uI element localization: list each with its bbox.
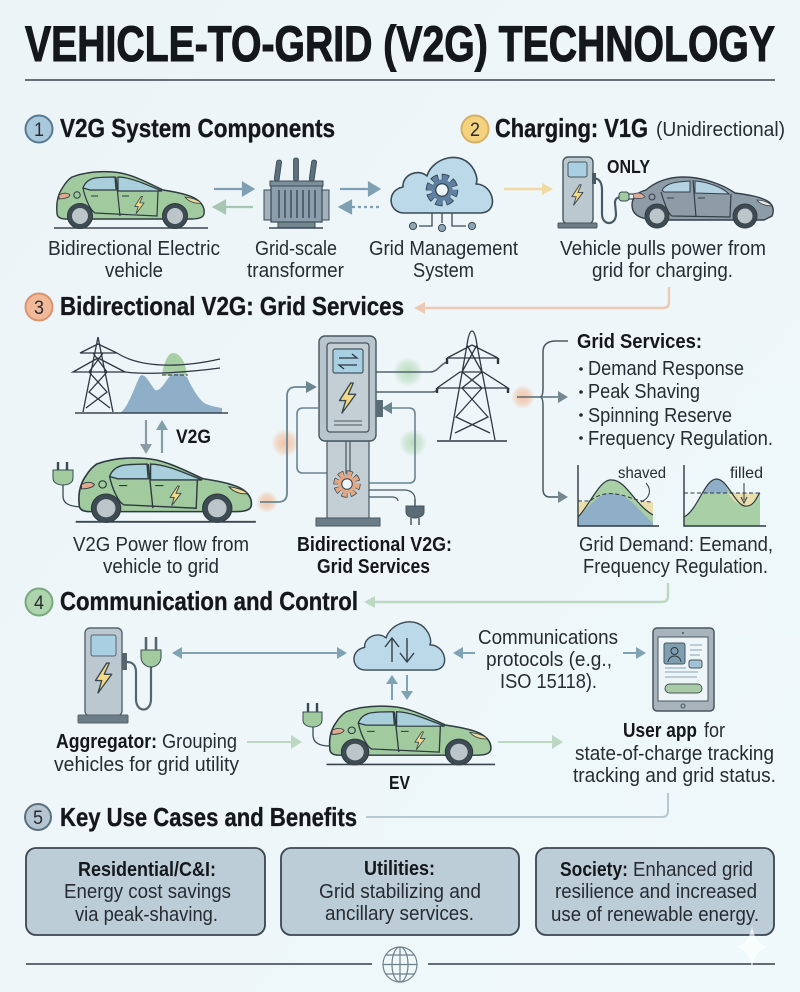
card: residential: [26, 848, 265, 935]
text: user app: User app: [623, 720, 697, 742]
panel: communication and control: [26, 586, 776, 817]
heading: Charging V1G: 2: [470, 120, 480, 141]
heading: Charging V1G: (Unidirectional): [656, 119, 785, 141]
icon: charging pump and plug: [558, 157, 634, 228]
card: utilities: [281, 848, 519, 935]
label: bidirectional V2G: Bidirectional V2G:: [297, 534, 452, 556]
card: utilities: ancillary services.: [325, 903, 474, 925]
icon: communications cloud: [354, 622, 445, 670]
text: user app: state-of-charge tracking: [575, 743, 774, 765]
heading: Charging V1G: [462, 113, 785, 143]
arrows: transformer and management system: [340, 183, 379, 213]
text: communications protocols: [478, 627, 618, 693]
panel: key use cases: [25, 802, 774, 935]
list: grid services: [577, 331, 773, 450]
text: aggregator: vehicles for grid utility: [54, 754, 239, 776]
arrow: EV to user app: [498, 735, 563, 749]
card: society: use of renewable energy.: [551, 904, 759, 926]
watermark sparkle: [736, 925, 768, 969]
icon: EV car: [327, 706, 495, 765]
text: vehicle pulls power: Vehicle pulls power from: [560, 238, 766, 260]
list: grid services: Spinning Reserve: [588, 405, 732, 427]
chart: peak shaved: shaved: [618, 465, 666, 482]
text: user app: for: [704, 720, 725, 742]
glows: [256, 357, 535, 513]
label: grid-scale transformer: Grid-scale: [255, 238, 337, 260]
heading: Bidirectional V2G Grid Services: Bidirectional V2G: Grid Services: [60, 291, 404, 321]
icon: grid management cloud: [391, 157, 492, 232]
arrow: aggregator to EV: [247, 735, 302, 749]
label: bidirectional electric vehicle: vehicle: [105, 260, 163, 282]
label: grid management system: Grid Management: [369, 238, 518, 260]
list: grid services: Demand Response: [588, 358, 744, 380]
card: residential: Residential/C&I:: [78, 859, 216, 881]
panel: bidirectional V2G: [26, 291, 773, 608]
heading: Communication and Control: Communication and Control: [60, 586, 358, 616]
label: grid demand: Frequency Regulation.: [583, 556, 768, 578]
chart: valley filled: [684, 465, 766, 526]
text: aggregator: Aggregator:: [56, 731, 157, 753]
footer with globe icon: [26, 947, 775, 982]
label: V2G power flow: V2G Power flow from: [73, 534, 249, 556]
heading: Charging V1G: Charging: V1G: [495, 113, 648, 143]
icon: gray car: [632, 177, 773, 228]
card: residential: via peak-shaving.: [75, 904, 218, 926]
icon: bidirectional charger: [316, 336, 424, 526]
icon: plug on car: [53, 462, 80, 507]
card: utilities: Utilities:: [364, 858, 435, 880]
arrow: yellow to charger: [504, 183, 553, 195]
card: society: [536, 848, 774, 935]
icon: aggregator charger: [78, 628, 161, 723]
text: communications protocols: ISO 15118).: [500, 671, 597, 693]
heading: Communication and Control: 4: [34, 593, 44, 614]
card: society: Enhanced grid: [633, 859, 753, 881]
label: grid demand: Grid Demand: Eemand,: [579, 534, 773, 556]
text: vehicle pulls power: grid for charging.: [592, 260, 733, 282]
arrows: car and transformer: [214, 183, 253, 213]
card: residential: Energy cost savings: [64, 881, 231, 903]
list: grid services: Peak Shaving: [588, 381, 700, 403]
text: vehicle pulls power: [560, 238, 766, 282]
list: grid services: Frequency Regulation.: [588, 428, 773, 450]
text: user app: [573, 720, 776, 787]
text: aggregator: Grouping: [162, 731, 237, 753]
arrow: to section 4: [364, 583, 668, 608]
label: bidirectional V2G: [297, 534, 452, 578]
icon: user app tablet: [653, 628, 714, 711]
icon: plug of EV: [303, 703, 330, 746]
arrows: protocols: [453, 647, 646, 659]
label: V2G power flow: vehicle to grid: [103, 556, 219, 578]
icon: transformer: [264, 158, 329, 228]
icon: green car: [76, 458, 256, 522]
chart: valley filled: filled: [730, 465, 763, 482]
text: user app: tracking and grid status.: [573, 765, 776, 787]
connectors to charger: [260, 362, 447, 502]
label: EV: EV: [389, 773, 410, 793]
text: communications protocols: protocols (e.g.,: [486, 649, 612, 671]
arrow: to section 3: [414, 287, 669, 314]
heading: Key Use Cases and Benefits: 5: [33, 808, 43, 829]
heading: V2G System Components: V2G System Components: [60, 113, 335, 143]
label: bidirectional V2G: Grid Services: [317, 556, 430, 578]
icon: tower with demand curve: [73, 337, 228, 413]
label: grid demand: [579, 534, 773, 578]
text: ONLY: ONLY: [607, 157, 650, 177]
heading: Key Use Cases and Benefits: Key Use Cases and Benefits: [60, 802, 357, 832]
label: bidirectional electric vehicle: [48, 238, 220, 282]
label: grid-scale transformer: [247, 238, 344, 282]
label: grid management system: [369, 238, 518, 282]
panel: V2G system components: [26, 113, 518, 282]
bracket connector: [517, 341, 568, 503]
heading: Bidirectional V2G Grid Services: 3: [34, 298, 44, 319]
card: society: Society:: [560, 859, 628, 881]
label: grid-scale transformer: transformer: [247, 260, 344, 282]
chart: peak shaved: [578, 465, 666, 526]
arrow: charger to cloud: [172, 647, 347, 659]
card: society: resilience and increased: [555, 881, 757, 903]
label: bidirectional electric vehicle: Bidirectional Electric: [48, 238, 220, 260]
icon: bidirectional electric car: [54, 172, 208, 228]
text: V2G: V2G: [176, 427, 211, 448]
arrows: V2G up and down: [140, 420, 168, 454]
text: aggregator: [54, 731, 239, 776]
arrow heads: [306, 381, 392, 414]
heading: V2G System Components: 1: [34, 120, 44, 141]
list: grid services: Grid Services:: [577, 331, 702, 353]
panel: V1G charging: [414, 113, 785, 314]
connector: to section 5: [366, 793, 668, 817]
arrows: cloud and EV: [386, 675, 413, 700]
card: utilities: Grid stabilizing and: [319, 881, 481, 903]
text: communications protocols: Communications: [478, 627, 618, 649]
icon: transmission tower: [437, 331, 508, 441]
label: V2G power flow: [73, 534, 249, 578]
label: grid management system: System: [413, 260, 474, 282]
